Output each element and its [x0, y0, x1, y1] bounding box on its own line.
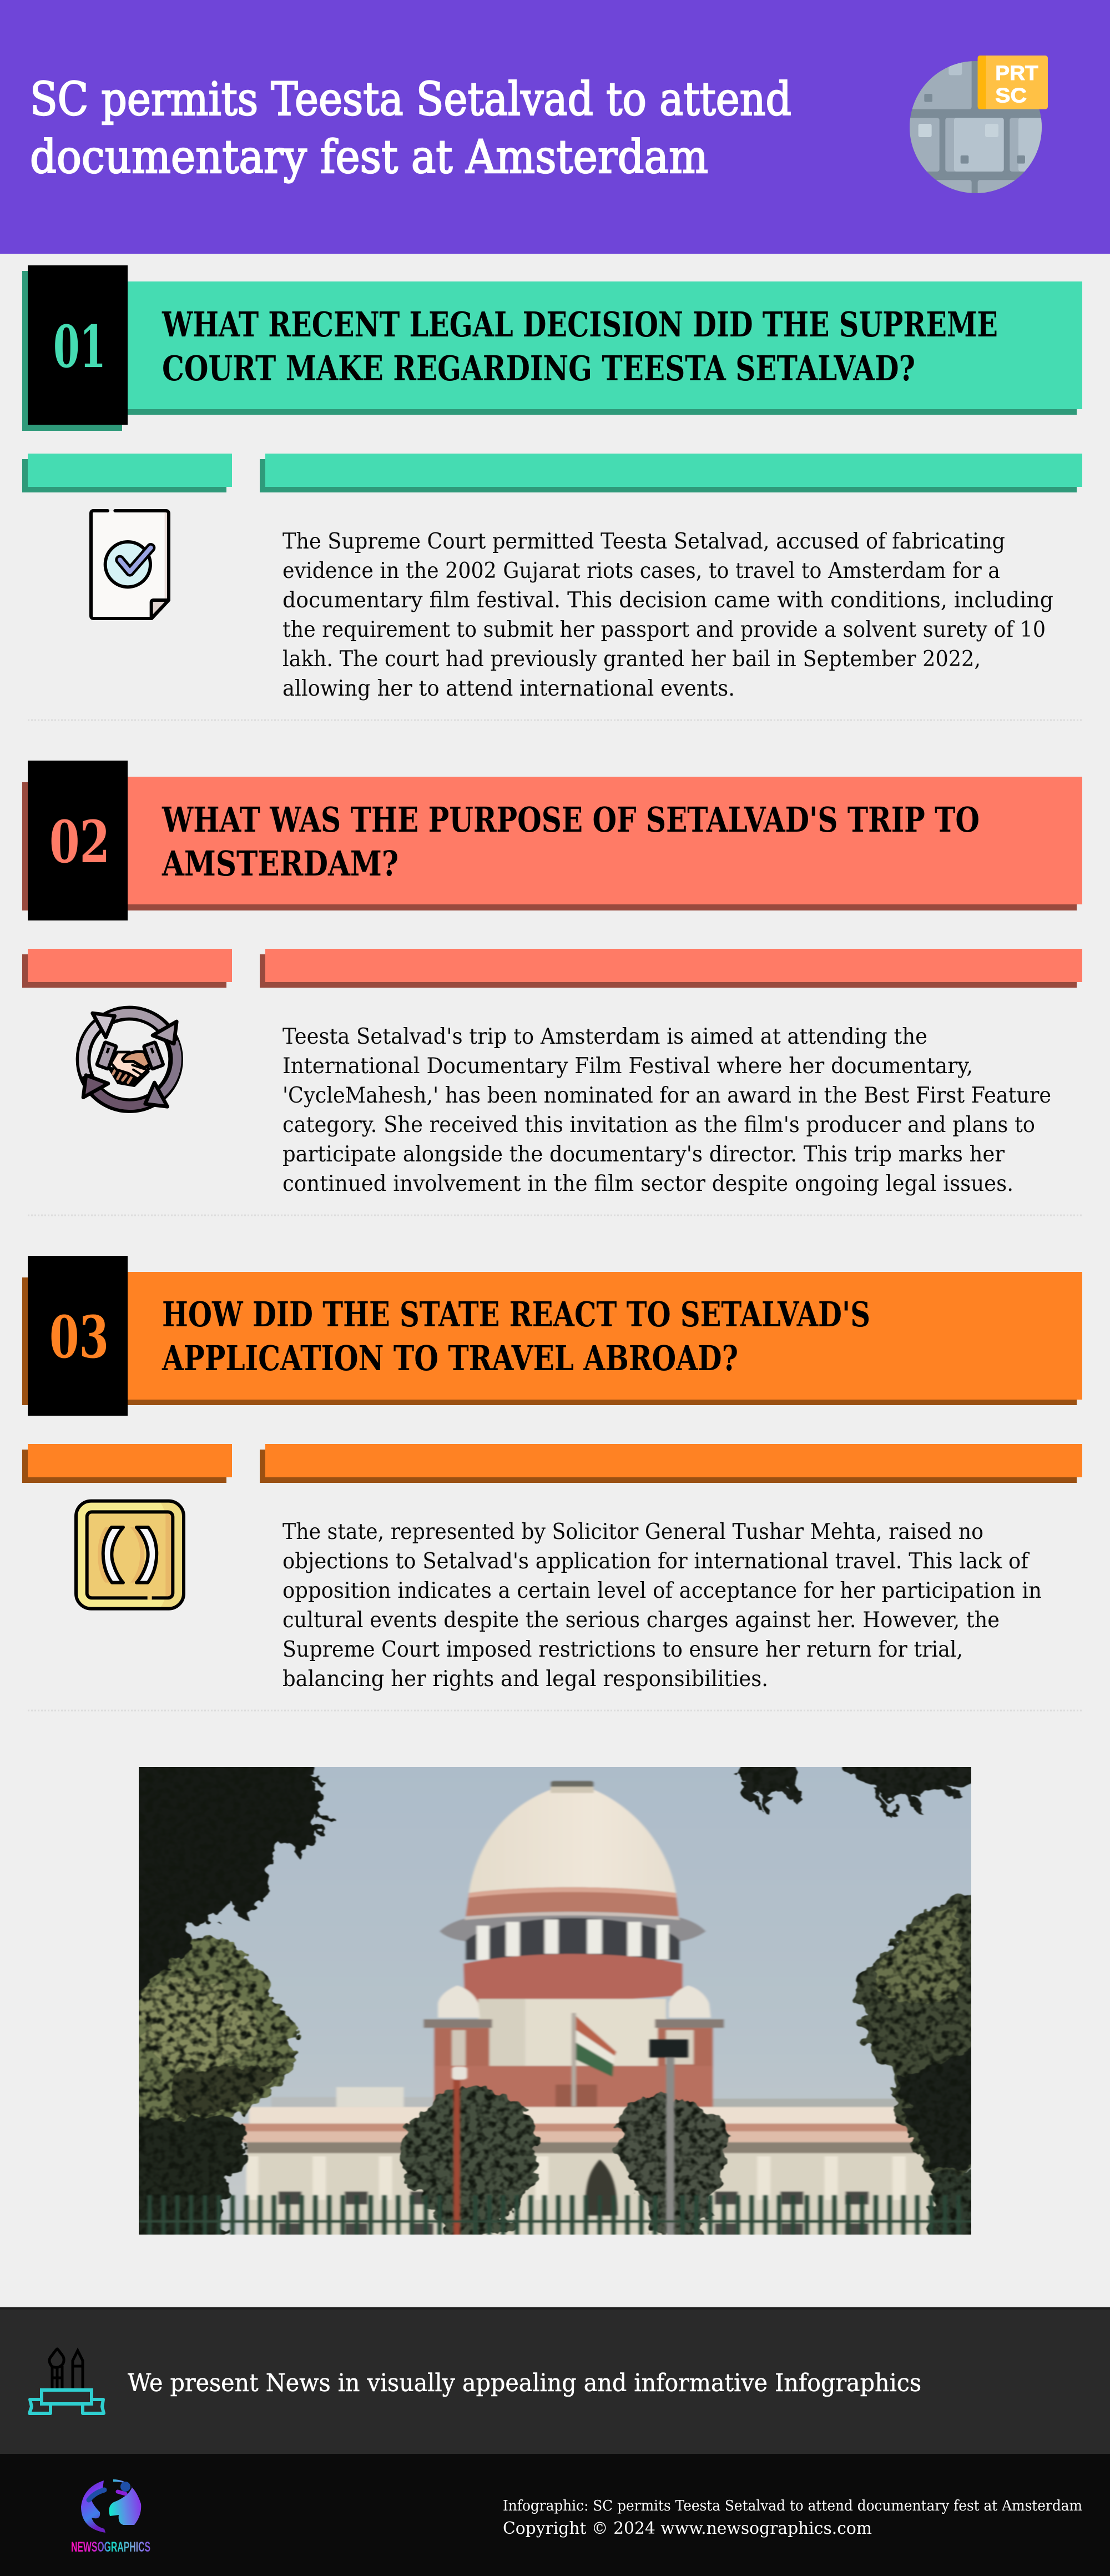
text block 03: opposition indicates a certain level of acceptance for her participation in	[282, 1578, 1042, 1603]
heading 02: AMSTERDAM?	[162, 843, 398, 884]
tagline band	[0, 2307, 1110, 2454]
heading 02	[162, 799, 980, 884]
title: SC permits Teesta Setalvad to attend	[30, 73, 791, 126]
icon: print screen key on keyboard: SC	[995, 84, 1027, 107]
text block 01: lakh. The court had previously granted her bail in September 2022,	[282, 646, 981, 672]
photo: Supreme Court of India building	[125, 1756, 983, 2240]
number badge 01: 01	[53, 313, 106, 381]
text block 02	[282, 1024, 1051, 1196]
trees	[125, 1756, 983, 2240]
icon: print screen key on keyboard: PRT	[995, 61, 1038, 84]
text block 02: International Documentary Film Festival where her documentary,	[282, 1053, 973, 1079]
number badge 01	[28, 265, 128, 425]
header banner	[0, 0, 1110, 254]
text block 02: 'CycleMahesh,' has been nominated for an award in the Best First Feature	[282, 1083, 1051, 1108]
title: documentary fest at Amsterdam	[30, 131, 708, 184]
text block 02: category. She received this invitation as the film's producer and plans to	[282, 1112, 1035, 1138]
credit line: Infographic: SC permits Teesta Setalvad to attend documentary fest at Amsterdam	[503, 2498, 1082, 2514]
number badge 03: 03	[49, 1303, 109, 1371]
tagline: We present News in visually appealing and informative Infographics	[128, 2369, 921, 2397]
accent bars 03	[22, 1444, 1082, 1483]
panel: question 02	[22, 761, 1082, 920]
text block 01: allowing her to attend international events.	[282, 676, 735, 701]
heading 01: COURT MAKE REGARDING TEESTA SETALVAD?	[162, 348, 915, 389]
icon: document with check mark	[91, 511, 169, 618]
icon: print screen key on keyboard	[903, 56, 1048, 199]
number badge 03	[28, 1256, 128, 1416]
logo: Newsographics: NEWSOGRAPHICS	[71, 2539, 150, 2555]
accent bars 02	[22, 949, 1082, 988]
panel: question 03	[22, 1256, 1082, 1416]
heading 01	[162, 304, 998, 389]
accent bars 01	[22, 454, 1082, 492]
title	[30, 73, 791, 184]
text block 03: cultural events despite the serious charges against her. However, the	[282, 1607, 1000, 1633]
copyright line: Copyright © 2024 www.newsographics.com	[503, 2519, 872, 2538]
text block 01: documentary film festival. This decision came with conditions, including	[282, 587, 1053, 613]
number badge 02: 02	[49, 808, 110, 876]
text block 01: evidence in the 2002 Gujarat riots cases, to travel to Amsterdam for a	[282, 558, 1000, 583]
icon: brush and pencil with banner	[29, 2349, 104, 2413]
footer	[0, 2454, 1110, 2576]
icon: handshake in cycle arrows	[83, 1013, 177, 1106]
text block 02: Teesta Setalvad's trip to Amsterdam is aimed at attending the	[282, 1024, 927, 1049]
number badge 02	[28, 761, 128, 920]
text block 02: participate alongside the documentary's director. This trip marks her	[282, 1141, 1005, 1167]
text block 02: continued involvement in the film sector despite ongoing legal issues.	[282, 1171, 1013, 1196]
panel: question 01	[22, 265, 1082, 431]
heading 03	[162, 1294, 870, 1378]
text block 01	[282, 529, 1053, 701]
text block 03: balancing her rights and legal responsibilities.	[282, 1666, 768, 1692]
text block 01: The Supreme Court permitted Teesta Setalvad, accused of fabricating	[282, 529, 1005, 554]
logo: Newsographics	[71, 2479, 150, 2555]
text block 01: the requirement to submit her passport and provide a solvent surety of 10	[282, 617, 1046, 642]
icon: parentheses key	[76, 1501, 184, 1609]
text block 03	[282, 1519, 1042, 1692]
text block 03: The state, represented by Solicitor General Tushar Mehta, raised no	[282, 1519, 983, 1544]
heading 03: APPLICATION TO TRAVEL ABROAD?	[162, 1338, 738, 1378]
text block 03: objections to Setalvad's application for international travel. This lack of	[282, 1548, 1030, 1574]
text block 03: Supreme Court imposed restrictions to ensure her return for trial,	[282, 1637, 963, 1662]
heading 03: HOW DID THE STATE REACT TO SETALVAD'S	[162, 1294, 870, 1335]
